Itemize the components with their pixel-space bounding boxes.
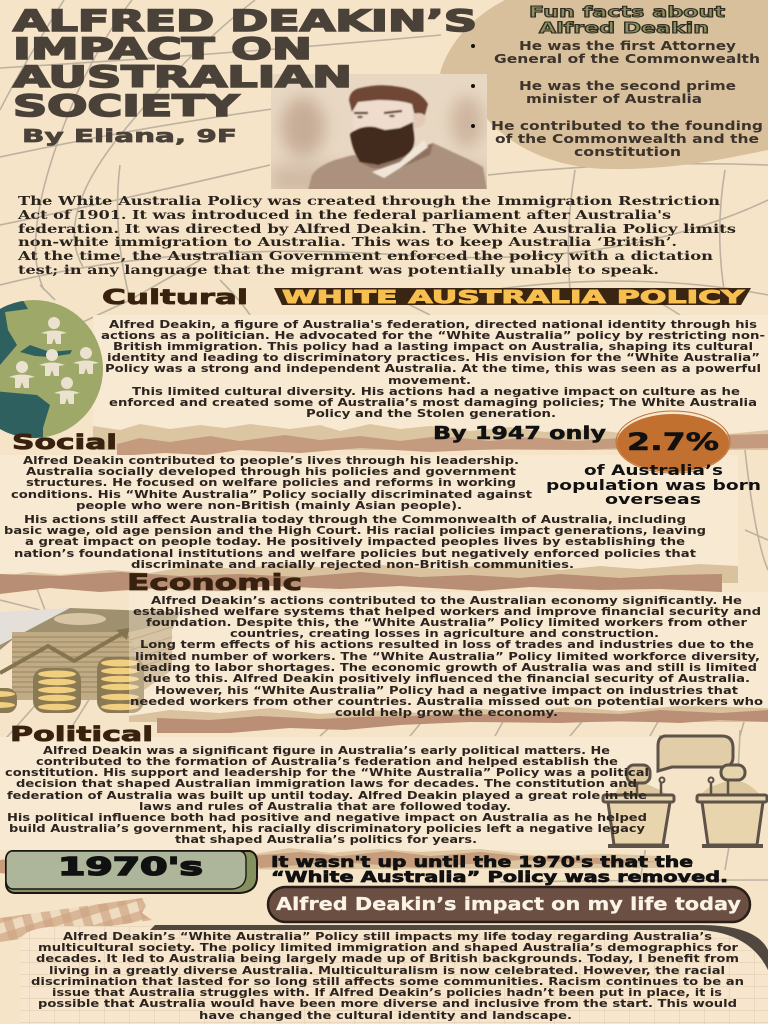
text: political: His political influence both had positive and negative impact on Australia as he helped xyxy=(7,811,647,824)
text: social: people who were non-British (mainly Asian people). xyxy=(76,499,462,512)
text: economic: leading to labor shortages. The economic growth of Australia was and still is limited xyxy=(136,661,757,674)
text: political: laws and rules of Australia that are followed today. xyxy=(139,800,511,813)
text: economic: needed workers from other countries. Australia missed out on potential workers who xyxy=(130,695,764,708)
text: cultural: actions as a politician. He advocated for the “White Australia” policy by restricting non- xyxy=(101,329,765,342)
text: social: a great impact on people today. He positively impacted peoples lives by establishing the xyxy=(25,535,685,548)
text: economic: limited number of workers. The “White Australia” Policy limited workforce diversity, xyxy=(135,650,760,663)
text: economic: Alfred Deakin’s actions contributed to the Australian economy significantly. He xyxy=(151,594,742,607)
fun facts list: of the Commonwealth and the xyxy=(495,132,759,146)
panel: social background xyxy=(0,455,738,573)
callout: policy removed xyxy=(271,853,728,886)
callout: policy removed: “White Australia” Policy was removed. xyxy=(271,868,728,886)
decorative tape xyxy=(0,898,152,942)
text: social: Alfred Deakin contributed to people’s lives through his leadership. xyxy=(23,454,519,467)
text: economic: foundation. Despite this, the “White Australia” Policy limited workers from other xyxy=(146,616,748,629)
stat caption: population was born xyxy=(546,478,761,494)
banner: White Australia Policy xyxy=(274,287,751,308)
text: cultural: identity and leading to discriminatory practices. His envision for the “White Australia” xyxy=(107,351,760,364)
text: political xyxy=(5,744,649,846)
heading: Political: Political xyxy=(10,722,153,746)
text: life today: living in a greatly diverse Australia. Multiculturalism is now celebrated. However, the racial xyxy=(49,964,725,977)
text: political: contributed to the formation of Australia’s federation and helped establish the xyxy=(36,755,618,768)
text: political: Alfred Deakin was a significant figure in Australia’s early political matters. He xyxy=(43,744,610,757)
panel: fun facts xyxy=(440,0,768,169)
text: social: nation’s foundational institutions and welfare policies but negatively enforced policies that xyxy=(14,547,696,560)
pill heading: impact on my life today xyxy=(268,887,750,922)
panel: economic background xyxy=(129,592,768,714)
text: life today: Alfred Deakin’s “White Australia” Policy still impacts my life today regarding Australia’s xyxy=(63,930,713,943)
fun facts list: General of the Commonwealth xyxy=(494,52,760,66)
stat: By 1947 only: By 1947 only xyxy=(433,423,606,444)
text: economic: Long term effects of his actions resulted in loss of trades and industries due to the xyxy=(140,638,754,651)
text: life today: decades. It led to Australia being largely made up of British backgrounds. Today, I benefit from xyxy=(36,952,739,965)
torn paper strip: bottom xyxy=(0,848,660,880)
panel: political background xyxy=(0,737,660,850)
heading: Cultural: Cultural xyxy=(102,285,248,309)
fun facts list xyxy=(471,39,763,159)
text: social: structures. He focused on welfare policies and reforms in working xyxy=(26,476,516,489)
fun facts list: He contributed to the founding xyxy=(491,119,763,133)
fun facts list: He was the first Attorney xyxy=(519,39,736,53)
text: life today: have changed the cultural identity and landscape. xyxy=(199,1009,572,1022)
torn paper strip: social xyxy=(0,564,738,594)
fun facts list: constitution xyxy=(574,145,681,159)
stat caption: overseas xyxy=(605,492,701,508)
text: social: discriminate and racially rejected non-British communities. xyxy=(131,558,574,571)
byline: By Eliana, 9F xyxy=(22,126,237,147)
stat circle: 2.7%: 2.7% xyxy=(627,428,719,456)
text: economic: However, his “White Australia” Policy had a negative impact on industries that xyxy=(155,684,738,697)
icon: podiums and speech bubble xyxy=(603,736,767,846)
text: political: that shaped Australia’s politics for years. xyxy=(175,833,477,846)
text: political: federation of Australia was built up until today. Alfred Deakin played a great role in the xyxy=(7,789,647,802)
title xyxy=(13,4,477,123)
text: political: constitution. His support and leadership for the “White Australia” Policy was a political xyxy=(5,766,649,779)
intro text: federation. It was directed by Alfred Deakin. The White Australia Policy limits xyxy=(18,221,736,236)
intro text xyxy=(17,193,736,277)
banner: White Australia Policy: WHITE AUSTRALIA POLICY xyxy=(282,287,746,308)
fun facts heading: Alfred Deakin xyxy=(539,19,709,37)
text: economic: established welfare systems that helped workers and improve financial security and xyxy=(133,605,761,618)
text: social: Australia socially developed through his policies and government xyxy=(26,465,516,478)
text: life today: issue that Australia struggles with. If Alfred Deakin’s policies hadn’t been put in place, it is xyxy=(52,986,723,999)
intro text: test; in any language that the migrant was potentially unable to speak. xyxy=(18,262,659,277)
box: 1970's: 1970's xyxy=(58,852,203,881)
text: life today xyxy=(31,930,744,1022)
text: cultural: Alfred Deakin, a figure of Australia's federation, directed national identity through his xyxy=(109,318,758,331)
text: life today: possible that Australia would have been more diverse and inclusive from the start. This would xyxy=(38,997,737,1010)
text: cultural: This limited cultural diversity. His actions had a negative impact on culture as he xyxy=(132,385,740,398)
photo: Alfred Deakin portrait xyxy=(271,74,487,195)
panel: cultural background xyxy=(93,315,768,433)
text: cultural xyxy=(101,318,765,420)
text: cultural: movement. xyxy=(388,374,471,387)
text: cultural: Policy was a strong and independent Australia. At the time, this was seen as a powerful xyxy=(105,362,761,375)
heading: Economic: Economic xyxy=(127,571,302,596)
text: cultural: British immigration. This policy had a lasting impact on Australia, shaping its cultural xyxy=(113,340,753,353)
stat caption: of Australia’s xyxy=(584,463,723,479)
text: economic: due to this. Alfred Deakin positively influenced the financial security of Australia. xyxy=(143,672,750,685)
fun facts list: minister of Australia xyxy=(526,92,702,106)
callout: policy removed: It wasn't up until the 1970's that the xyxy=(271,853,693,871)
stat caption xyxy=(546,463,761,508)
text: economic xyxy=(130,594,764,719)
panel: life today xyxy=(20,925,768,1024)
title: IMPACT ON xyxy=(13,32,312,66)
fun facts heading: Fun facts about xyxy=(529,3,725,21)
title: ALFRED DEAKIN’S xyxy=(13,4,477,38)
stat circle: 2.7% xyxy=(616,411,730,473)
text: social: basic wage, old age pension and the High Court. His racial policies impact generations, leaving xyxy=(4,524,706,537)
text: economic: could help grow the economy. xyxy=(335,706,558,719)
text: social xyxy=(4,454,706,571)
text: life today: discrimination that lasted for so long still affects some communities. Racism continues to be an xyxy=(31,975,744,988)
text: social: His actions still affect Australia today through the Commonwealth of Australia, including xyxy=(24,513,686,526)
icon: globe with people xyxy=(0,295,103,445)
text: cultural: enforced and created some of Australia’s most damaging policies; The White Australia xyxy=(109,396,757,409)
intro text: Act of 1901. It was introduced in the federal parliament after Australia's xyxy=(17,207,671,222)
intro text: At the time, the Australian Government enforced the policy with a dictation xyxy=(17,248,713,263)
title: AUSTRALIAN xyxy=(13,60,352,94)
heading: Social: Social xyxy=(12,430,117,454)
text: life today: multicultural society. The policy limited immigration and shaped Australia’s demographics for xyxy=(38,941,739,954)
icon: money and coins xyxy=(0,608,180,713)
title: SOCIETY xyxy=(13,89,241,123)
pill heading: impact on my life today: Alfred Deakin’s impact on my life today xyxy=(276,894,741,915)
torn paper strip: economic xyxy=(129,706,768,733)
fun facts list: He was the second prime xyxy=(519,79,736,93)
fun facts heading xyxy=(529,3,725,37)
intro text: non-white immigration to Australia. This was to keep Australia ‘British’. xyxy=(18,234,677,249)
text: social: conditions. His “White Australia” Policy socially discriminated against xyxy=(11,488,532,501)
text: cultural: Policy and the Stolen generation. xyxy=(306,407,556,420)
text: economic: countries, creating losses in agriculture and construction. xyxy=(230,627,659,640)
box: 1970's xyxy=(6,851,257,893)
torn paper strip: cultural xyxy=(93,424,768,456)
text: political: decision that shaped Australian immigration laws for decades. The constitution and xyxy=(16,777,637,790)
text: political: build Australia’s government, his racially discriminatory policies left a negative legacy xyxy=(9,822,645,835)
intro text: The White Australia Policy was created through the Immigration Restriction xyxy=(18,193,720,208)
